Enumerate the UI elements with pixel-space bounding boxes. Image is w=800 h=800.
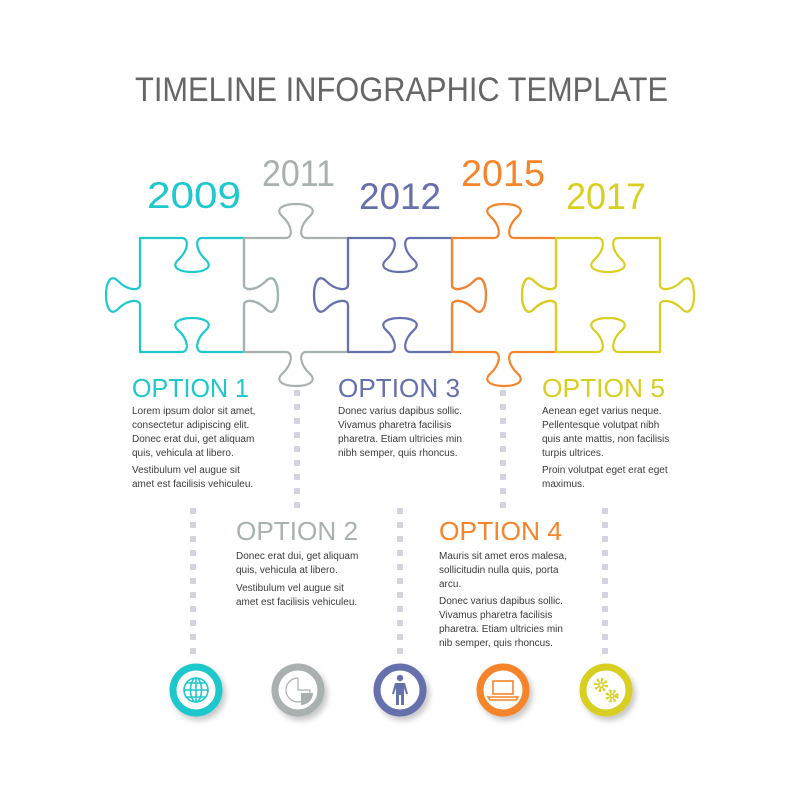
option 5: quis ante mattis, non facilisis <box>542 434 669 445</box>
option 4: pharetra. Etiam ultricies min <box>439 624 563 635</box>
option 1: quis, vehicula at libero. <box>132 448 234 459</box>
years <box>147 153 646 217</box>
option 2: OPTION 2 <box>236 516 358 546</box>
option 3: Vivamus pharetra facilisis <box>338 420 451 431</box>
option 1: consectetur adipiscing elit. <box>132 420 249 431</box>
years: 2012 <box>359 176 441 217</box>
years: 2015 <box>461 153 545 194</box>
option 2: Donec erat dui, get aliquam <box>236 551 358 562</box>
option 4: nib semper, quis rhoncus. <box>439 638 553 649</box>
option 3: OPTION 3 <box>338 373 460 403</box>
option 4: arcu. <box>439 579 461 590</box>
option 5: maximus. <box>542 479 585 490</box>
option 5: Aenean eget varius neque. <box>542 406 662 417</box>
option 3 <box>338 373 462 459</box>
piece: gray <box>244 204 348 386</box>
years: 2009 <box>147 175 241 216</box>
option 2: quis, vehicula at libero. <box>236 565 338 576</box>
option 5: OPTION 5 <box>542 373 665 403</box>
option 4: Vivamus pharetra facilisis <box>439 610 552 621</box>
option 5: turpis ultrices. <box>542 448 604 459</box>
option 5 <box>542 373 669 490</box>
option 1: Lorem ipsum dolor sit amet, <box>132 406 255 417</box>
option 1: Vestibulum vel augue sit <box>132 465 240 476</box>
option 3: pharetra. Etiam ultricies min <box>338 434 462 445</box>
option 2: Vestibulum vel augue sit <box>236 583 344 594</box>
title: TIMELINE INFOGRAPHIC TEMPLATE <box>135 71 668 109</box>
icon: pie chart <box>275 667 321 713</box>
piece: blue <box>314 238 486 352</box>
icon: laptop <box>480 667 526 713</box>
option 1: OPTION 1 <box>132 373 249 403</box>
dotted connectors <box>190 390 608 654</box>
option 1 <box>132 373 255 490</box>
option 2: amet est facilisis vehiculeu. <box>236 597 357 608</box>
piece: yellow <box>522 238 694 352</box>
option 5: Pellentesque volutpat nibh <box>542 420 659 431</box>
option 4: Donec varius dapibus sollic. <box>439 596 563 607</box>
option 2 <box>236 516 358 608</box>
option 3: Donec varius dapibus sollic. <box>338 406 462 417</box>
puzzle pieces <box>106 204 694 386</box>
icon: person <box>377 667 423 713</box>
option 1: amet est facilisis vehiculeu. <box>132 479 253 490</box>
icon: globe <box>173 667 219 713</box>
option 4: sollicitudin nulla quis, porta <box>439 565 559 576</box>
option 4: Mauris sit amet eros malesa, <box>439 551 567 562</box>
option 1: Donec erat dui, get aliquam <box>132 434 254 445</box>
option 4 <box>439 516 567 649</box>
option 3: nibh semper, quis rhoncus. <box>338 448 458 459</box>
years: 2011 <box>262 153 335 194</box>
years: 2017 <box>566 176 646 217</box>
option 5: Proin volutpat eget erat eget <box>542 465 668 476</box>
piece: cyan <box>106 238 278 352</box>
icon: gears <box>583 667 629 713</box>
piece: orange <box>452 204 556 386</box>
option 4: OPTION 4 <box>439 516 562 546</box>
